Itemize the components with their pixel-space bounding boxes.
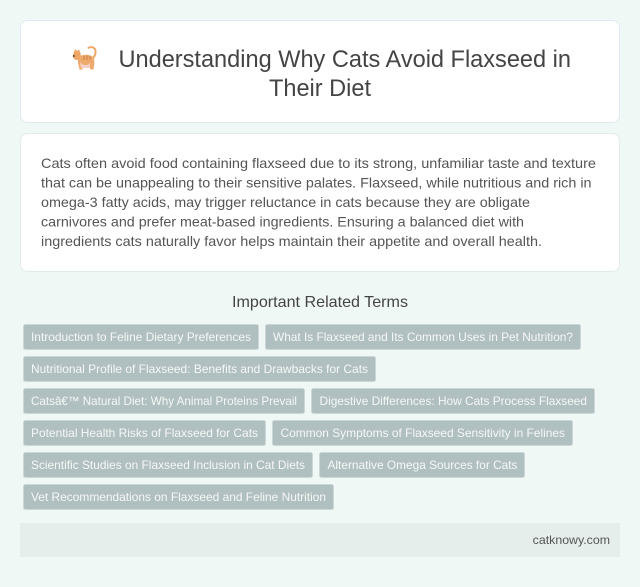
panel: title card bbox=[20, 20, 620, 122]
title text: Their Diet bbox=[269, 75, 371, 102]
footer source text: catknowy.com bbox=[533, 533, 610, 547]
title text bbox=[118, 46, 571, 102]
tag: Common Symptoms of Flaxseed Sensitivity in Felines bbox=[280, 426, 565, 440]
tag bbox=[24, 324, 258, 350]
footer bar bbox=[20, 523, 620, 557]
panel: summary card bbox=[20, 134, 620, 272]
tag: What Is Flaxseed and Its Common Uses in Pet Nutrition? bbox=[273, 330, 573, 344]
tag bbox=[24, 420, 266, 446]
tag bbox=[24, 452, 312, 478]
summary paragraph: omega-3 fatty acids, may trigger reluctance in cats because they are obligate bbox=[41, 194, 530, 210]
tag: Alternative Omega Sources for Cats bbox=[328, 458, 518, 472]
heading: related terms: Important Related Terms bbox=[232, 294, 408, 311]
tag bbox=[312, 388, 594, 414]
summary paragraph: Cats often avoid food containing flaxseed due to its strong, unfamiliar taste and texture bbox=[41, 155, 596, 171]
summary paragraph: ingredients cats naturally favor helps maintain their appetite and overall health. bbox=[41, 233, 542, 249]
title text: Understanding Why Cats Avoid Flaxseed in bbox=[118, 46, 571, 73]
tag: Introduction to Feline Dietary Preferences bbox=[31, 330, 251, 344]
tag: Digestive Differences: How Cats Process Flaxseed bbox=[320, 394, 587, 408]
panel: related term tags bbox=[24, 324, 594, 510]
summary paragraph: carnivores and prefer meat-based ingredients. Ensuring a balanced diet with bbox=[41, 214, 524, 230]
tag bbox=[272, 420, 572, 446]
tag bbox=[266, 324, 580, 350]
summary paragraph bbox=[41, 155, 596, 249]
tag: Vet Recommendations on Flaxseed and Feline Nutrition bbox=[31, 490, 326, 504]
tag bbox=[24, 484, 334, 510]
tag bbox=[320, 452, 524, 478]
summary paragraph: that can be unappealing to their sensitive palates. Flaxseed, while nutritious and rich in bbox=[41, 174, 592, 190]
tag bbox=[24, 356, 376, 382]
tag bbox=[24, 388, 304, 414]
icon: cat bbox=[73, 47, 96, 70]
tag: Potential Health Risks of Flaxseed for Cats bbox=[31, 426, 258, 440]
tag: Nutritional Profile of Flaxseed: Benefits and Drawbacks for Cats bbox=[31, 362, 368, 376]
tag: Catsâ€™ Natural Diet: Why Animal Proteins Prevail bbox=[31, 394, 297, 408]
tag: Scientific Studies on Flaxseed Inclusion in Cat Diets bbox=[31, 458, 305, 472]
